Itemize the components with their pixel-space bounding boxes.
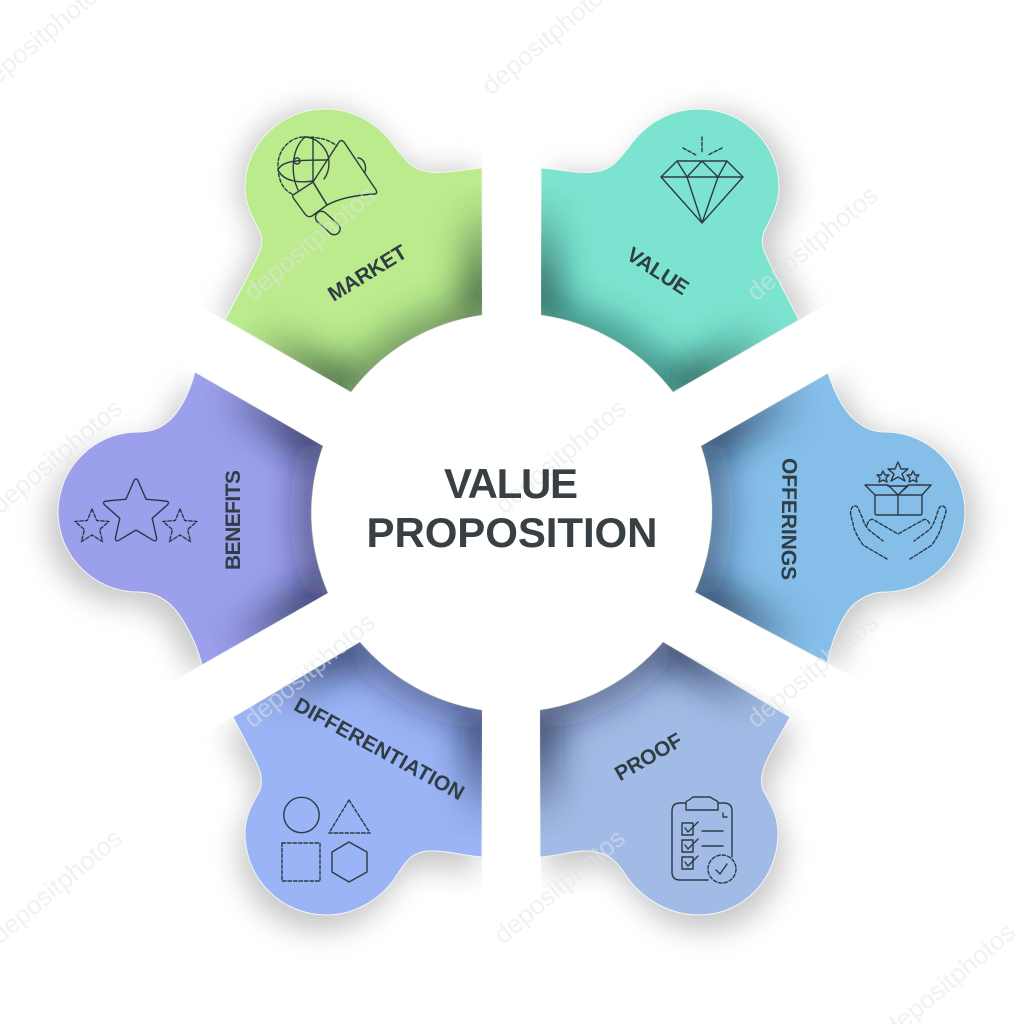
stock watermark: depositphotos <box>488 823 631 950</box>
icon: globe and megaphone <box>278 137 377 237</box>
stock watermark: depositphotos <box>238 180 381 307</box>
title: value proposition <box>366 460 658 556</box>
white centre hub and dividers <box>135 90 892 934</box>
stock watermark: depositphotos <box>741 180 884 307</box>
label: offerings: OFFERINGS <box>776 458 801 580</box>
panel: offerings <box>695 373 965 663</box>
icon: diamond <box>661 137 743 223</box>
panel: proof <box>540 642 790 915</box>
label: value: VALUE <box>622 243 693 300</box>
icon: clipboard checklist <box>672 797 736 883</box>
icon: geometric shapes <box>282 797 370 882</box>
panel: value <box>541 109 799 392</box>
stock watermark: depositphotos <box>238 607 381 734</box>
panel: benefits <box>58 372 328 665</box>
label: benefits: BENEFITS <box>222 470 245 570</box>
icon: gift box in hands <box>851 462 946 559</box>
label: market: MARKET <box>324 241 411 306</box>
label: differentiation: DIFFERENTIATION <box>290 694 468 805</box>
stock watermark: depositphotos <box>741 607 884 734</box>
label: proof: PROOF <box>611 729 687 786</box>
panel: market <box>225 109 482 392</box>
stock watermark: depositphotos <box>489 393 632 520</box>
icon: three stars <box>75 479 197 542</box>
panel: differentiation <box>233 642 482 915</box>
title: value proposition: VALUE <box>444 460 578 507</box>
petal cast shadows <box>47 108 976 931</box>
title: value proposition: PROPOSITION <box>366 509 658 556</box>
